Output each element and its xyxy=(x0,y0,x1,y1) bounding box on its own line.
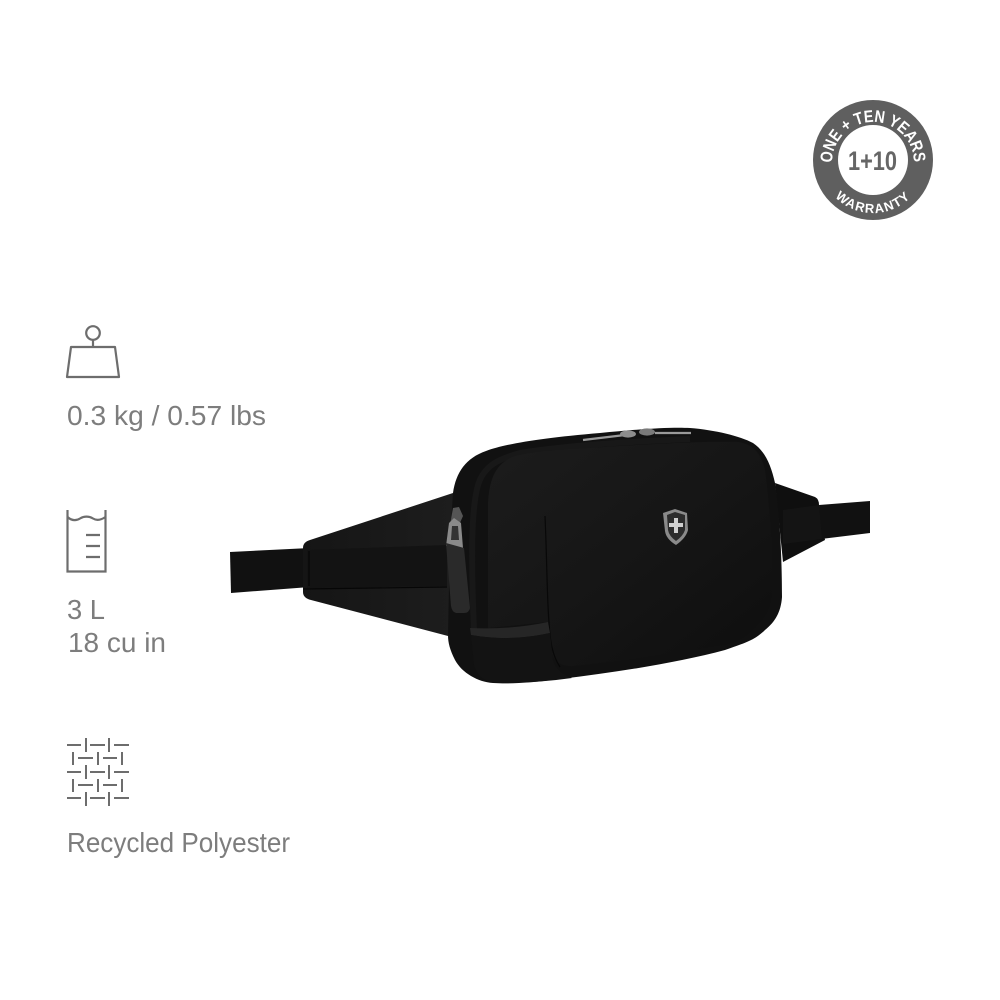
left strap band xyxy=(303,545,447,589)
panel seam xyxy=(545,516,560,667)
right padded wing xyxy=(775,483,825,562)
volume text xyxy=(67,594,166,658)
badge text: 1+10: 1+10 xyxy=(848,146,897,176)
icon: weight xyxy=(67,326,119,377)
material text: Recycled Polyester xyxy=(67,827,290,858)
bottom trim xyxy=(470,622,572,682)
badge text: one + ten years: ONE + TEN YEARS xyxy=(820,110,926,162)
volume text: 3 L xyxy=(67,594,105,625)
bag body xyxy=(448,428,782,683)
weight text: 0.3 kg / 0.57 lbs xyxy=(67,400,266,431)
right strap xyxy=(783,501,870,544)
icon: volume beaker xyxy=(68,510,106,572)
logo shield xyxy=(663,509,688,545)
zipper gusset xyxy=(472,439,690,630)
left padded wing xyxy=(303,493,470,636)
badge text: warranty: WARRANTY xyxy=(836,190,908,214)
icon: woven fabric xyxy=(67,738,129,806)
warranty badge xyxy=(813,100,933,220)
left strap end xyxy=(230,548,310,593)
side zipper pull xyxy=(446,507,470,613)
front panel xyxy=(488,442,773,666)
volume text: 18 cu in xyxy=(68,627,166,658)
top zipper xyxy=(583,428,691,440)
product: black sling bag xyxy=(230,428,870,683)
